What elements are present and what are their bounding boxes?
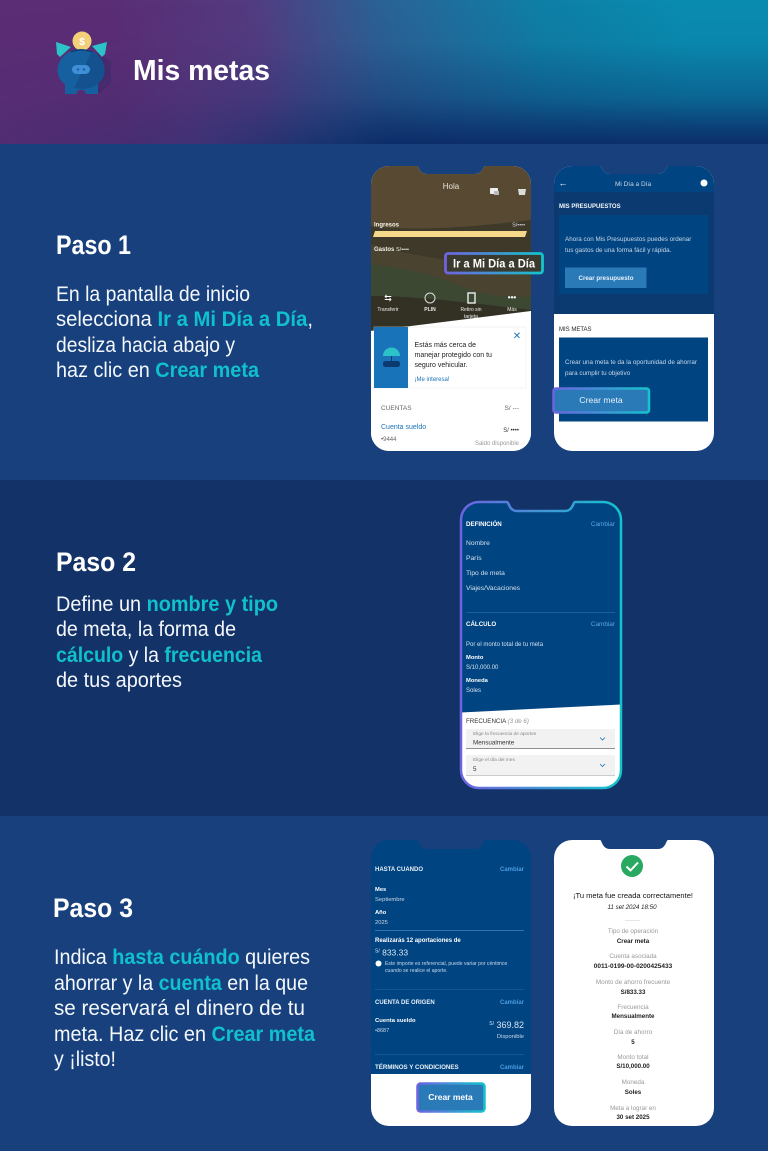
panel: paso 2 — [0, 480, 768, 816]
phone: confirmation screen: Crear meta — [617, 938, 650, 945]
phone: hasta cuándo screen: 369.82 — [494, 1020, 524, 1030]
phone: definition form: S/10,000.00 — [466, 665, 499, 671]
phone: definition form: Cambiar — [591, 621, 616, 628]
phone: definition form: Nombre — [466, 540, 490, 547]
phone: home screen: Hola — [443, 182, 460, 191]
text block: paso 3 instructions: meta. Haz clic en Crear meta — [54, 1022, 316, 1046]
phone: definition form: DEFINICIÓN — [466, 520, 502, 528]
phone: hasta cuándo screen: 833.33 — [380, 948, 408, 958]
phone: confirmation screen: S/833.33 — [621, 989, 646, 996]
promo card: manejar protegido con tu — [414, 352, 492, 359]
phone: home screen: Gastos S/•••• — [374, 247, 409, 253]
phone: confirmation screen: Monto total — [617, 1054, 649, 1061]
text block: paso 2 instructions: de meta, la forma de — [56, 617, 236, 641]
phone: Mi Día a Día screen: Mi Día a Día — [615, 181, 651, 188]
header banner — [0, 0, 768, 144]
phone: hasta cuándo screen: Este importe es referencial, puede variar por céntimos — [385, 961, 508, 967]
text block: paso 2 instructions — [56, 592, 278, 692]
phone: Mi Día a Día screen: Crear una meta te da la oportunidad de ahorrar — [565, 359, 697, 366]
title: Mis metas — [133, 55, 270, 87]
phone: confirmation screen: 0011-0199-00-0200425433 — [594, 963, 673, 970]
phone: confirmation screen: Monto de ahorro frecuente — [596, 979, 671, 986]
phone: confirmation screen — [554, 840, 714, 1126]
panel: paso 1 — [56, 166, 714, 451]
phone: home screen: ••• — [508, 293, 516, 302]
icon: piggy bank with coin — [56, 32, 111, 94]
text block: paso 2 instructions: de tus aportes — [56, 668, 182, 692]
phone: home screen: S/ --- — [505, 405, 519, 412]
phone: definition form: 5 — [473, 766, 477, 773]
panel: paso 3 — [54, 840, 714, 1126]
phone: home screen: Saldo disponible — [475, 441, 520, 447]
phone: hasta cuándo screen: •8687 — [375, 1028, 389, 1034]
phone: hasta cuándo screen: TÉRMINOS Y CONDICIONES — [375, 1063, 459, 1071]
text block: paso 2 instructions: Define un nombre y tipo — [56, 592, 278, 616]
phone: home screen: Más — [507, 307, 517, 313]
phone: confirmation screen: Tipo de operación — [608, 928, 659, 935]
text block: paso 1 instructions: haz clic en Crear meta — [56, 358, 260, 382]
icon: piggy bank with coin: $ — [79, 36, 85, 48]
phone: hasta cuándo screen: Mes — [375, 887, 386, 893]
phone: Mi Día a Día screen — [554, 166, 714, 451]
phone: confirmation screen: Frecuencia — [617, 1004, 649, 1011]
phone: confirmation screen: Soles — [625, 1089, 642, 1096]
phone: confirmation screen: 30 set 2025 — [616, 1114, 650, 1121]
phone: definition form: Viajes/Vacaciones — [466, 585, 521, 592]
phone: home screen: tarjeta — [464, 314, 478, 320]
text block: paso 1 instructions — [56, 282, 313, 382]
phone: Mi Día a Día screen: MIS PRESUPUESTOS — [559, 204, 621, 210]
text block: paso 3 instructions — [54, 945, 316, 1071]
text block: paso 3 instructions: se reservará el dinero de tu — [54, 996, 305, 1020]
promo card: seguro vehicular. — [414, 362, 467, 369]
text block: paso 3 instructions: y ¡listo! — [54, 1047, 116, 1071]
callout: Crear meta confirm button: Crear meta — [428, 1092, 473, 1102]
heading: paso 1: Paso 1 — [56, 230, 131, 260]
phone: definition form: Tipo de meta — [466, 570, 505, 577]
text block: paso 1 instructions: selecciona Ir a Mi Día a Día, — [56, 307, 313, 331]
phone: hasta cuándo screen: Cambiar — [500, 867, 525, 873]
phone: confirmation screen: S/10,000.00 — [616, 1063, 650, 1070]
phone: hasta cuándo screen: Año — [375, 910, 387, 916]
promo card: Estás más cerca de — [414, 342, 476, 349]
phone: hasta cuándo screen: CUENTA DE ORIGEN — [375, 1000, 435, 1006]
text block: paso 3 instructions: Indica hasta cuándo quieres — [54, 945, 310, 969]
phone: hasta cuándo screen — [371, 840, 531, 1126]
phone: definition form: Elige el día del mes — [473, 757, 515, 763]
phone: Mi Día a Día screen: MIS METAS — [559, 327, 592, 333]
text block: paso 1 instructions: En la pantalla de inicio — [56, 282, 250, 306]
phone: definition form: Elige la frecuencia de aportes — [473, 731, 537, 737]
phone: hasta cuándo screen: HASTA CUANDO — [375, 867, 423, 873]
phone: hasta cuándo screen: Cambiar — [500, 1000, 525, 1006]
text block: paso 2 instructions: cálculo y la frecuencia — [56, 643, 263, 667]
phone: definition form: Monto — [466, 655, 484, 661]
phone: confirmation screen: Mensualmente — [612, 1013, 655, 1020]
icon: success check — [621, 855, 643, 877]
promo card — [374, 327, 526, 388]
phone: home screen: CUENTAS — [381, 405, 412, 412]
text block: paso 1 instructions: desliza hacia abajo y — [56, 333, 235, 357]
phone: confirmation screen: Meta a lograr en — [610, 1105, 656, 1112]
phone: confirmation screen: 11 set 2024 18:50 — [607, 904, 657, 911]
promo card: ¡Me interesa! — [414, 377, 450, 383]
phone: confirmation screen: ¡Tu meta fue creada correctamente! — [573, 893, 693, 900]
phone: Mi Día a Día screen: tus gastos de una forma fácil y rápida. — [565, 247, 672, 254]
phone: definition form: FRECUENCIA (3 de 6) — [466, 718, 529, 725]
phone: confirmation screen: Moneda — [622, 1079, 645, 1086]
heading: paso 2: Paso 2 — [56, 547, 136, 577]
phone: home screen — [371, 166, 531, 451]
callout: Ir a Mi Día a Día — [446, 254, 542, 273]
phone: hasta cuándo screen: 2025 — [375, 920, 388, 926]
phone: hasta cuándo screen: cuando se realice el aporte. — [385, 968, 448, 974]
phone: definition form: Por el monto total de tu meta — [466, 642, 544, 648]
phone: hasta cuándo screen: S/ — [375, 948, 380, 954]
phone: hasta cuándo screen: Septiembre — [375, 897, 405, 903]
phone: definition form: Mensualmente — [473, 740, 515, 746]
callout: Crear meta button: Crear meta — [579, 395, 623, 405]
phone: Mi Día a Día screen: ← — [558, 178, 568, 188]
heading: paso 3: Paso 3 — [53, 893, 133, 923]
phone: definition form: CÁLCULO — [466, 621, 496, 628]
callout: Ir a Mi Día a Día: Ir a Mi Día a Día — [453, 258, 536, 270]
phone: Mi Día a Día screen: para cumplir tu objetivo — [565, 370, 631, 377]
phone: Mi Día a Día screen: Crear presupuesto — [578, 275, 634, 282]
promo card: ✕ — [513, 331, 521, 342]
text block: paso 3 instructions: ahorrar y la cuenta en la que — [54, 971, 308, 995]
phone: home screen: Transferir — [377, 307, 399, 313]
phone: confirmation screen: Cuenta asociada — [609, 953, 657, 960]
phone: definition form — [461, 502, 621, 788]
phone: home screen: Ingresos — [374, 222, 400, 228]
phone: hasta cuándo screen: Disponible — [497, 1034, 524, 1040]
phone: definition form: Soles — [466, 688, 481, 694]
phone: home screen: Cuenta sueldo — [381, 424, 426, 431]
phone: home screen: •9444 — [381, 437, 397, 443]
phone: home screen: S/ •••• — [503, 428, 519, 434]
phone: definition form: París — [466, 555, 482, 562]
phone: hasta cuándo screen: S/ — [489, 1021, 495, 1027]
phone: confirmation screen: 5 — [631, 1039, 635, 1046]
phone: hasta cuándo screen: Cuenta sueldo — [375, 1018, 416, 1024]
callout: Crear meta button — [554, 388, 649, 412]
phone: home screen: PLIN — [424, 307, 436, 313]
callout: Crear meta confirm button — [418, 1084, 484, 1112]
phone: hasta cuándo screen: Cambiar — [500, 1065, 525, 1071]
phone: definition form: Cambiar — [591, 521, 616, 528]
phone: home screen: S/•••• — [512, 222, 525, 228]
phone: Mi Día a Día screen: Ahora con Mis Presupuestos puedes ordenar — [565, 236, 691, 243]
phone: home screen: ⇆ — [384, 293, 392, 303]
phone: definition form: Moneda — [466, 678, 489, 684]
phone: home screen: Retiro sin — [460, 307, 482, 313]
phone: hasta cuándo screen: Realizarás 12 aportaciones de — [375, 938, 461, 944]
phone: confirmation screen: Día de ahorro — [614, 1029, 653, 1036]
